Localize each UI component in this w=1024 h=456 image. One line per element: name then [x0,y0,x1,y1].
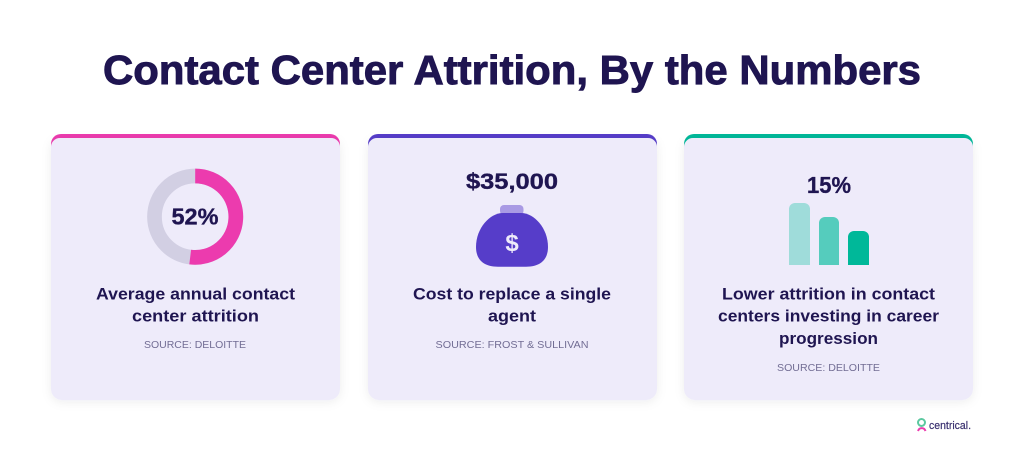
source: SOURCE: DELOITTE [777,362,880,374]
panel: replacement cost [368,134,657,400]
cost figure: $35,000 [466,169,558,194]
donut value: 52% [172,204,218,230]
source: SOURCE: DELOITTE [144,339,246,351]
description line 2: centers investing in career [718,308,940,326]
description line 1: Average annual contact [96,286,296,304]
logo mark [918,419,926,431]
source: SOURCE: FROST & SULLIVAN [436,339,588,351]
title: Contact Center Attrition, By the Numbers [103,47,921,93]
bar chart [789,203,869,265]
logo: centrical: centrical. [929,420,971,432]
card body [684,138,973,400]
description line 1: Lower attrition in contact [722,286,936,304]
panel: average attrition [51,134,340,400]
donut chart: 52% [154,176,236,257]
description line 1: Cost to replace a single [413,286,611,304]
panel: career progression [684,134,973,400]
percentage figure: 15% [807,172,851,198]
description line 3: progression [779,330,878,348]
card accent: indigo [368,134,657,154]
icon: money bag: $ [505,230,519,257]
card accent: teal [684,134,973,154]
card accent: pink [51,134,340,154]
description line 2: agent [488,308,537,326]
card body [368,138,657,400]
icon: money bag [476,205,548,267]
description line 2: center attrition [132,308,259,326]
card body [51,138,340,400]
